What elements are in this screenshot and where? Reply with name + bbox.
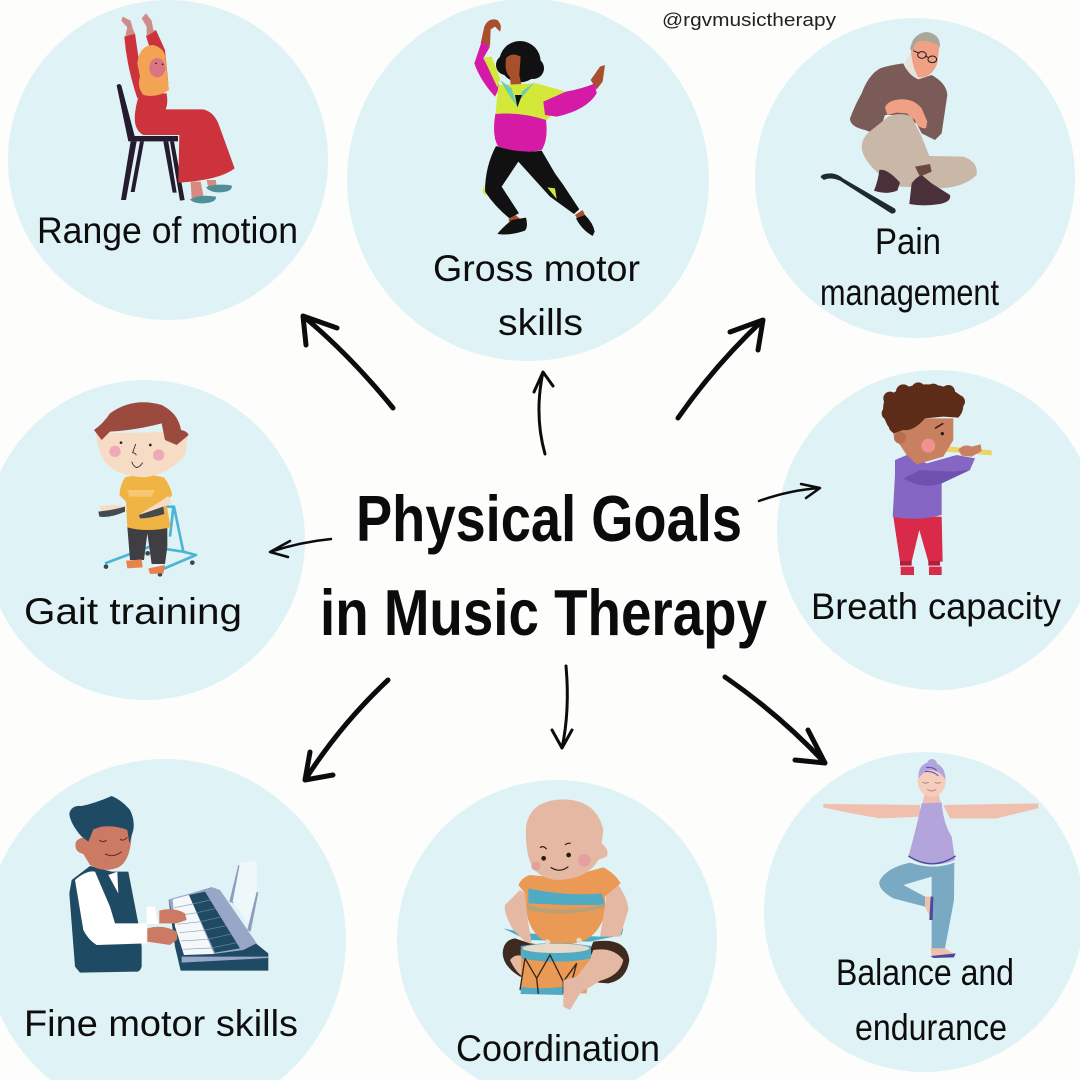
title: Physical Goals xyxy=(356,482,742,555)
panel: fine motor skills xyxy=(0,759,346,1080)
title xyxy=(320,482,767,649)
label: Balance and xyxy=(836,952,1014,993)
icon: woman in chair raising arms xyxy=(117,13,235,203)
label: skills xyxy=(498,302,583,343)
panel: pain management xyxy=(755,18,1075,338)
icon: child with walker xyxy=(94,402,196,577)
title: in Music Therapy xyxy=(320,576,767,649)
label: Fine motor skills xyxy=(24,1003,298,1044)
panel: coordination xyxy=(397,780,717,1080)
arrow: to breath capacity xyxy=(759,484,820,501)
arrow: to pain management xyxy=(678,320,763,418)
label: Gross motor xyxy=(433,248,640,289)
label: Coordination xyxy=(456,1028,660,1069)
label xyxy=(820,221,1000,313)
arrow: to balance and endurance xyxy=(725,677,825,763)
icon: baby with drum xyxy=(503,799,629,1010)
label: Gait training xyxy=(24,591,242,632)
arrow: to gross motor skills xyxy=(534,372,553,454)
panel: breath capacity xyxy=(777,370,1080,690)
icon: seated man holding knee xyxy=(821,32,977,214)
label xyxy=(836,952,1014,1048)
panel: gross motor skills xyxy=(347,0,709,361)
handle: rgvmusictherapy: @rgvmusictherapy xyxy=(662,10,836,30)
icon: man playing keyboard xyxy=(69,796,268,973)
label xyxy=(433,248,640,343)
arrow: to gait training xyxy=(270,539,331,557)
arrow: to coordination xyxy=(552,666,572,748)
panel: gait training xyxy=(0,380,305,700)
label: Breath capacity xyxy=(811,586,1061,627)
icon: child playing flute xyxy=(882,382,992,575)
icon: dancing woman xyxy=(474,19,605,236)
panel: range of motion xyxy=(8,0,328,320)
label: Range of motion xyxy=(37,210,298,251)
label: management xyxy=(820,272,1000,313)
label: endurance xyxy=(855,1007,1007,1048)
icon: woman in tree pose xyxy=(823,759,1038,958)
arrow: to range of motion xyxy=(303,316,393,408)
panel: balance and endurance xyxy=(764,752,1080,1072)
label: Pain xyxy=(875,221,941,262)
arrow: to fine motor skills xyxy=(305,680,388,780)
